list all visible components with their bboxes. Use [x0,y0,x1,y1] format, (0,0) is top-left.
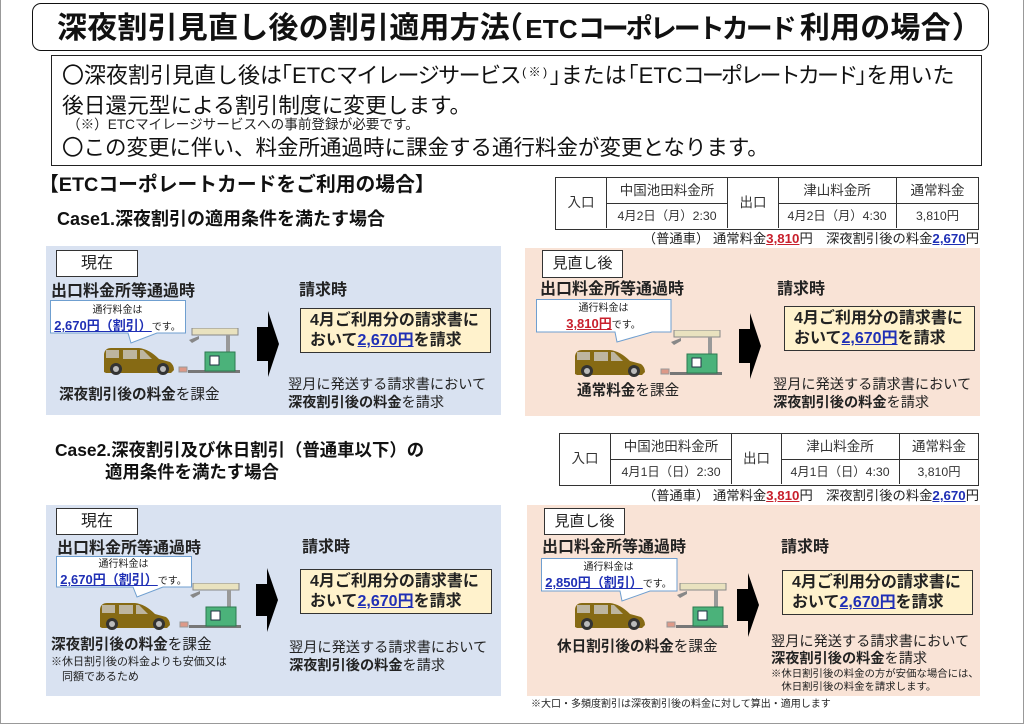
exit heading: 出口料金所等通過時 [51,283,195,300]
icon: toll gate [666,583,728,628]
billing footnote: 休日割引後の料金を請求します。 [781,682,936,693]
charge caption: 通常料金を課金 [577,383,679,399]
tag [56,508,138,535]
bill box: 4月ご利用分の請求書に [310,573,479,590]
bill box: おいて2,670円を請求 [310,593,462,610]
footnote: ※休日割引後の料金よりも安価又は [51,656,227,668]
case 2 route table: 中国池田料金所 [624,439,718,454]
bill box [784,306,975,351]
title [32,3,989,51]
case 1 route table: 中国池田料金所 [620,183,714,198]
bubble text: 通行料金は [578,303,628,314]
bill box: 4月ご利用分の請求書に [792,574,961,591]
icon: toll gate [660,330,722,375]
bill box [300,569,492,614]
bubble text [60,558,187,587]
bill box: おいて2,670円を請求 [310,332,462,349]
speech bubble [50,300,186,344]
case 1 route table: 入口 [568,195,594,210]
panel: case 2 current [46,505,501,696]
tag: 現在 [81,513,113,530]
bubble text: 通行料金は [92,305,142,316]
intro text box [51,55,982,166]
footnote: 同額であるため [62,671,139,683]
case 1 route table: 3,810円 [916,209,959,223]
intro line 2: 後日還元型による割引制度に変更します。 [62,93,471,118]
exit heading: 出口料金所等通過時 [540,281,684,298]
icon: car [100,603,170,630]
tag: 見直し後 [554,513,614,530]
section heading: 【ETCコーポレートカードをご利用の場合】 [39,174,435,196]
intro footnote: （※）ETCマイレージサービスへの事前登録が必要です。 [67,117,419,132]
case 2 route table: 入口 [572,451,598,466]
bubble text [54,304,181,333]
tag [542,250,623,278]
speech bubble [541,558,678,602]
case 1 route table: 4月2日（月）4:30 [787,209,887,223]
intro line 1: 〇深夜割引見直し後は「ETCマイレージサービス(※)」または「ETCコーポレートカード」を用いた [62,63,954,88]
billing caption: 翌月に発送する請求書において [771,634,969,650]
charge caption: 深夜割引後の料金を課金 [51,637,212,653]
icon: car [104,348,174,375]
billing heading: 請求時 [781,539,829,556]
tag [544,508,625,535]
arrow [257,311,279,377]
charge caption: 深夜割引後の料金を課金 [59,387,220,403]
panel: case 1 revised [525,248,980,416]
billing footnote: ※休日割引後の料金の方が安価な場合には、 [771,669,979,680]
case 2 fare note: （普通車） 通常料金3,810円 深夜割引後の料金2,670円 [643,488,979,503]
panel: case 2 revised [527,505,980,696]
arrow [739,313,761,379]
intro line 3: 〇この変更に伴い、料金所通過時に課金する通行料金が変更となります。 [62,136,769,160]
case 2 route table: 津山料金所 [806,439,874,454]
case 2 route table: 出口 [743,451,770,466]
bill box [300,308,491,353]
title: 深夜割引見直し後の割引適用方法（ETCコーポレートカード利用の場合） [57,12,982,45]
billing caption: 深夜割引後の料金を請求 [288,395,444,411]
bubble text: 2,670円（割引）です。 [54,318,181,333]
case 1 route table: 津山料金所 [803,183,871,198]
charge caption: 休日割引後の料金を課金 [557,639,718,655]
case 2 route table: 通常料金 [912,439,966,454]
billing heading: 請求時 [299,282,347,299]
billing heading: 請求時 [302,539,350,556]
billing caption: 翌月に発送する請求書において [773,377,971,393]
billing caption: 翌月に発送する請求書において [289,640,487,656]
bill box [782,570,973,615]
bubble text [566,302,641,331]
billing caption [289,640,487,674]
case 1 route table: 通常料金 [910,183,964,198]
case 2 route table: 4月1日（日）2:30 [621,465,721,479]
bill box: 4月ご利用分の請求書に [310,312,479,329]
billing caption: 深夜割引後の料金を請求 [289,658,445,674]
bubble text: 2,850円（割引）です。 [545,575,672,590]
bubble text [545,561,672,590]
billing caption: 深夜割引後の料金を請求 [771,651,927,667]
tag: 見直し後 [552,255,612,272]
case 2 route table: 4月1日（日）4:30 [790,465,890,479]
bubble text: 通行料金は [98,559,148,570]
arrow [737,573,759,637]
tag: 現在 [81,255,113,272]
bill box: おいて2,670円を請求 [794,330,946,347]
billing caption: 深夜割引後の料金を請求 [773,395,929,411]
billing caption [773,376,971,411]
speech bubble [536,299,672,343]
icon: car [575,350,645,377]
billing caption: 翌月に発送する請求書において [288,377,486,393]
case 2 route table: 3,810円 [917,465,961,479]
case 1 route table: 出口 [740,195,766,210]
case 1 route table: 4月2日（月）2:30 [617,209,717,223]
billing caption [771,634,969,667]
icon: toll gate [180,583,241,628]
bill box: 4月ご利用分の請求書に [794,310,963,327]
billing footnote [771,668,979,693]
billing caption [288,376,486,411]
footnote [51,656,227,683]
icon: toll gate [178,328,240,373]
case 2 heading: Case2.深夜割引及び休日割引（普通車以下）の [55,440,424,460]
arrow [256,568,278,632]
exit heading: 出口料金所等通過時 [57,540,201,557]
case 2 heading: 適用条件を満たす場合 [105,462,279,482]
bubble text: 2,670円（割引）です。 [60,572,187,587]
bubble text: 通行料金は [584,562,634,573]
billing heading: 請求時 [777,281,825,298]
case 2 route table [559,433,979,486]
bill box: おいて2,670円を請求 [792,594,944,611]
bubble text: 3,810円です。 [566,316,641,331]
panel: case 1 current [46,246,501,415]
case 1 heading: Case1.深夜割引の適用条件を満たす場合 [57,209,385,229]
case 1 route table [555,177,979,230]
tag [56,250,138,277]
icon: car [575,603,645,630]
case 1 fare note: （普通車） 通常料金3,810円 深夜割引後の料金2,670円 [643,231,979,246]
speech bubble [56,556,192,598]
case 2 heading [55,440,424,482]
bottom footnote: ※大口・多頻度割引は深夜割引後の料金に対して算出・適用します [531,699,831,710]
exit heading: 出口料金所等通過時 [542,539,686,556]
